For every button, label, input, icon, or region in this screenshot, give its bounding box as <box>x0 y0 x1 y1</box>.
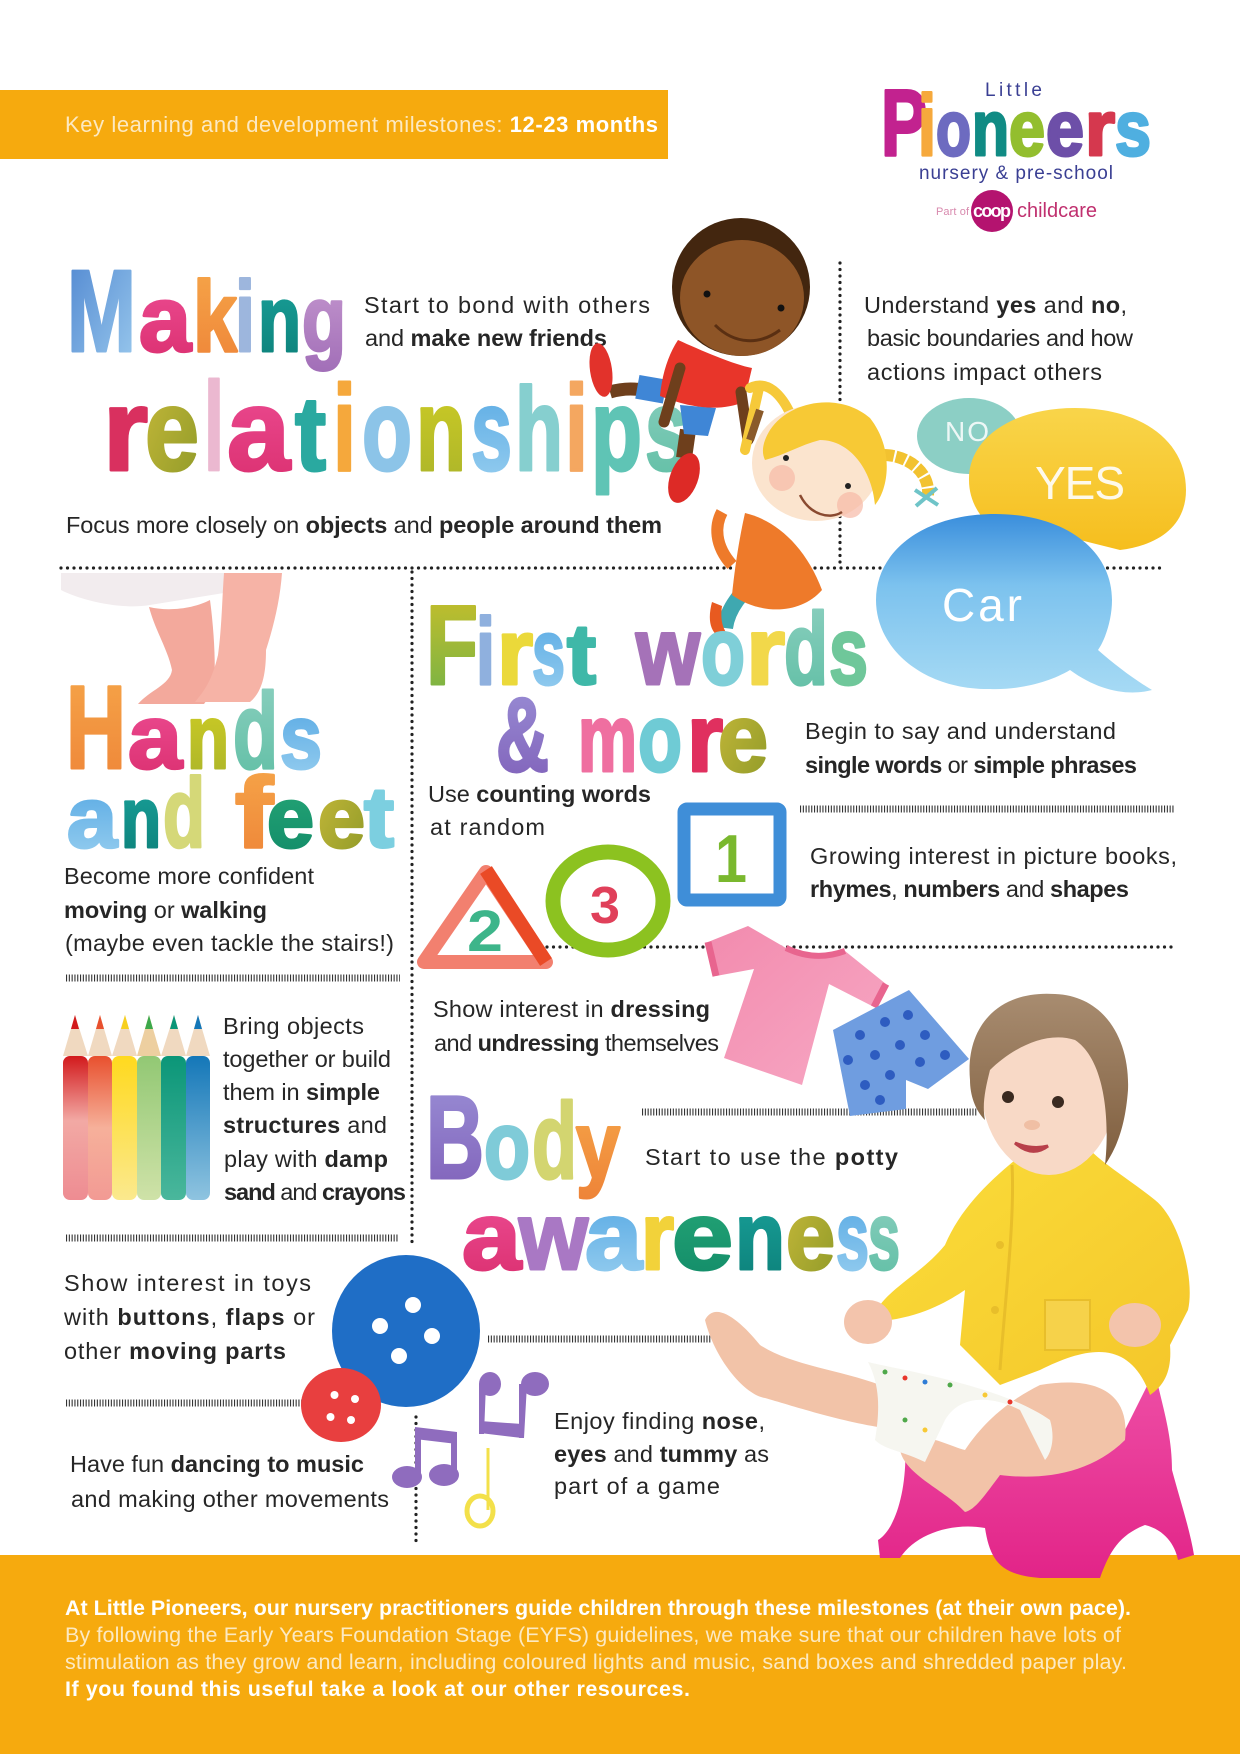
baby raised leg <box>705 1312 900 1430</box>
text block: bring objects: together or build <box>223 1046 391 1072</box>
title: Hands and feet: a <box>128 688 183 788</box>
text block: first words: Growing interest in picture books, <box>810 843 1177 869</box>
text block: toys: Show interest in toys <box>64 1270 311 1296</box>
title: Making relationships: k <box>193 261 237 373</box>
text block: bring objects <box>223 1013 406 1205</box>
title: First words & more: o <box>701 598 745 705</box>
text block: hands and feet: moving or walking <box>64 897 267 923</box>
text block: dancing <box>70 1451 389 1512</box>
text block: first words: at random <box>430 814 545 840</box>
title: Making relationships: a <box>139 267 192 371</box>
title: Making relationships: g <box>302 267 346 371</box>
title: First words & more <box>426 583 868 794</box>
title: First words & more: t <box>567 608 596 703</box>
text block: bring objects: Bring objects <box>223 1013 364 1039</box>
title: Hands and feet: n <box>187 688 229 788</box>
title: Making relationships: s <box>645 365 688 495</box>
logo wordmark: e <box>1009 84 1045 172</box>
icon: number 2 triangle: 2 <box>467 899 503 964</box>
text block: making relationships: basic boundaries and how <box>867 325 1134 351</box>
title: Making relationships: i <box>565 360 588 496</box>
logo wordmark <box>881 70 1151 175</box>
title: Making relationships: n <box>258 267 301 371</box>
footer text: stimulation as they grow and learn, including coloured lights and music, sand boxes and shredded paper play. <box>65 1650 1127 1674</box>
title: Body awareness: a <box>462 1183 522 1290</box>
title: Hands and feet: t <box>364 771 394 866</box>
title: Making relationships: l <box>204 358 224 497</box>
title: Making relationships: n <box>416 365 466 495</box>
title: Hands and feet: s <box>280 688 322 788</box>
title: Body awareness: e <box>672 1183 733 1290</box>
title: Body awareness: w <box>518 1183 588 1290</box>
text block: making relationships: Understand yes and no, <box>864 292 1127 318</box>
logo: Little Pioneers: Part of <box>936 206 970 218</box>
logo: Little Pioneers: childcare <box>1017 200 1097 222</box>
speech bubble: YES: YES <box>1035 457 1125 509</box>
text block: bring objects: structures and <box>223 1112 387 1138</box>
text block: body awareness: part of a game <box>554 1473 720 1499</box>
title: Body awareness: s <box>868 1183 900 1290</box>
title: Making relationships: t <box>295 376 326 493</box>
text block: body awareness: Enjoy finding nose, <box>554 1408 765 1434</box>
text block: first words: single words or simple phrases <box>805 752 1137 778</box>
title: Making relationships: i <box>333 360 356 496</box>
illustration: music notes <box>392 1372 549 1526</box>
logo: Little Pioneers <box>881 70 1151 232</box>
illustration: red button <box>301 1368 381 1442</box>
title: Hands and feet: H <box>66 662 126 794</box>
title: First words & more: F <box>426 583 478 708</box>
text block: making relationships: and make new friends <box>365 325 607 351</box>
speech bubble: Car: Car <box>942 579 1022 631</box>
baby nose <box>1024 1120 1040 1130</box>
title: Hands and feet <box>66 662 394 869</box>
text block: toys <box>63 1270 315 1364</box>
text block: body awareness: Start to use the potty <box>645 1144 898 1170</box>
speech bubble: NO <box>917 398 1021 474</box>
illustration: girl <box>710 386 938 642</box>
logo wordmark: o <box>936 84 971 172</box>
text block: dressing: and undressing themselves <box>434 1030 719 1056</box>
title: Making relationships: s <box>471 365 512 495</box>
footer text: At Little Pioneers, our nursery practitioners guide children through these milestones (at their own pace). <box>65 1596 1131 1620</box>
logo wordmark: i <box>918 78 936 174</box>
logo wordmark: n <box>972 84 1009 172</box>
text block: bring objects: play with damp <box>224 1146 388 1172</box>
title: Body awareness: r <box>641 1183 674 1290</box>
text block: toys: with buttons, flaps or <box>63 1304 315 1330</box>
logo: Little Pioneers: coop <box>973 201 1011 221</box>
title: Making relationships: o <box>362 365 412 495</box>
illustration: baby feet <box>61 573 282 704</box>
photo: baby on pink potty <box>705 994 1194 1578</box>
speech bubble: NO: NO <box>945 416 989 447</box>
logo: Little Pioneers: Little <box>985 80 1042 101</box>
baby nappy <box>868 1362 1053 1462</box>
baby head <box>981 995 1117 1175</box>
title: First words & more: & <box>496 677 549 794</box>
title: Hands and feet: e <box>318 771 365 866</box>
logo wordmark: r <box>1085 84 1115 172</box>
text block: hands and feet: Become more confident <box>64 863 314 889</box>
title: Body awareness: y <box>576 1092 620 1199</box>
title: First words & more: i <box>476 599 495 705</box>
nappy pattern <box>882 1370 1012 1432</box>
footer text: If you found this useful take a look at our other resources. <box>65 1677 690 1701</box>
title: First words & more: d <box>784 592 828 706</box>
footer text <box>65 1596 1131 1701</box>
dotted dividers <box>61 263 1177 1542</box>
title: Hands and feet: f <box>235 757 274 869</box>
title: Body awareness: e <box>786 1183 835 1290</box>
logo: Little Pioneers: nursery & pre-school <box>919 163 1113 184</box>
text block: first words: Begin to say and understand <box>805 718 1116 744</box>
baby eyes <box>1002 1091 1014 1103</box>
header text: Key learning and development milestones: 12-23 months <box>65 112 658 137</box>
logo wordmark: e <box>1046 84 1084 172</box>
icon: number 3 circle <box>553 852 663 950</box>
title: Hands and feet: d <box>163 758 205 868</box>
text block: hands and feet <box>64 863 394 956</box>
text block: first words: Use counting words <box>428 781 651 807</box>
text block: making relationships: actions impact others <box>867 359 1102 385</box>
text block: body awareness: eyes and tummy as <box>554 1441 769 1467</box>
title: Making relationships <box>67 246 688 497</box>
text block: making relationships: Focus more closely on objects and people around them <box>66 512 662 538</box>
title: Making relationships: M <box>67 246 136 376</box>
coat pocket and buttons <box>991 1165 1090 1370</box>
title: First words & more: r <box>687 685 723 792</box>
text block: hands and feet: (maybe even tackle the stairs!) <box>65 930 394 956</box>
title: Body awareness: o <box>484 1092 530 1199</box>
speech bubble: YES <box>969 408 1186 550</box>
logo wordmark: s <box>1115 84 1151 172</box>
speech bubble: Car <box>876 514 1152 693</box>
text block: first words <box>428 718 1177 902</box>
icon: number 3 circle: 3 <box>590 877 620 935</box>
text block: dressing: Show interest in dressing <box>433 996 710 1022</box>
text block: bring objects: them in simple <box>223 1079 380 1105</box>
baby mouth <box>1015 1143 1048 1151</box>
text block: dancing: and making other movements <box>71 1486 389 1512</box>
title: First words & more: r <box>497 600 533 704</box>
icon: number 1 square <box>684 809 780 900</box>
title: Hands and feet: a <box>67 771 118 866</box>
title: Body awareness: d <box>532 1080 577 1201</box>
illustration: spotted blue shorts <box>833 990 969 1116</box>
title: First words & more: s <box>532 600 565 704</box>
footer band <box>0 1555 1240 1754</box>
squiggle dividers <box>66 809 1175 1403</box>
text block: making relationships <box>66 292 1134 538</box>
title: Hands and feet: e <box>267 771 314 866</box>
illustration: boy <box>586 218 810 507</box>
baby coat <box>880 1150 1190 1395</box>
icon: number 2 triangle <box>424 870 546 964</box>
title: Making relationships: r <box>103 365 148 495</box>
title: Body awareness: a <box>585 1183 643 1290</box>
potty <box>878 1370 1194 1578</box>
baby hair <box>970 994 1128 1165</box>
title: First words & more: r <box>746 598 785 705</box>
title: First words & more: e <box>718 685 768 792</box>
title: First words & more: s <box>829 598 868 705</box>
title: Body awareness: n <box>735 1183 785 1290</box>
text block: making relationships: Start to bond with others <box>364 292 650 318</box>
title: Hands and feet: d <box>233 670 278 791</box>
title: Making relationships: a <box>227 365 291 495</box>
text block: dancing: Have fun dancing to music <box>70 1451 364 1477</box>
title: Making relationships: p <box>591 365 642 495</box>
text block: toys: other moving parts <box>64 1338 286 1364</box>
title: Body awareness <box>426 1072 900 1290</box>
text block: bring objects: sand and crayons <box>224 1179 406 1205</box>
title: First words & more: o <box>638 685 682 792</box>
baby hands <box>844 1300 892 1344</box>
footer text: By following the Early Years Foundation Stage (EYFS) guidelines, we make sure that our children have lots of <box>65 1623 1121 1647</box>
header band <box>0 90 668 159</box>
title: Making relationships: e <box>145 365 199 495</box>
title: Hands and feet: n <box>121 771 161 866</box>
title: First words & more: w <box>635 598 700 705</box>
icon: number 1 square: 1 <box>715 821 747 897</box>
logo wordmark: P <box>881 70 927 175</box>
illustration: coloured pencils <box>63 1015 210 1200</box>
title: Making relationships: h <box>515 364 563 496</box>
title: Making relationships: i <box>235 261 255 373</box>
title: Body awareness: s <box>836 1183 869 1290</box>
baby bent leg <box>900 1382 1126 1512</box>
title: First words & more: m <box>578 685 637 792</box>
illustration: pink t-shirt <box>708 926 886 1085</box>
title: Body awareness: B <box>426 1072 484 1204</box>
illustration: blue button <box>332 1255 480 1407</box>
text block: dressing <box>433 996 719 1056</box>
text block: body awareness <box>554 1144 898 1499</box>
text block: first words: rhymes, numbers and shapes <box>810 876 1129 902</box>
